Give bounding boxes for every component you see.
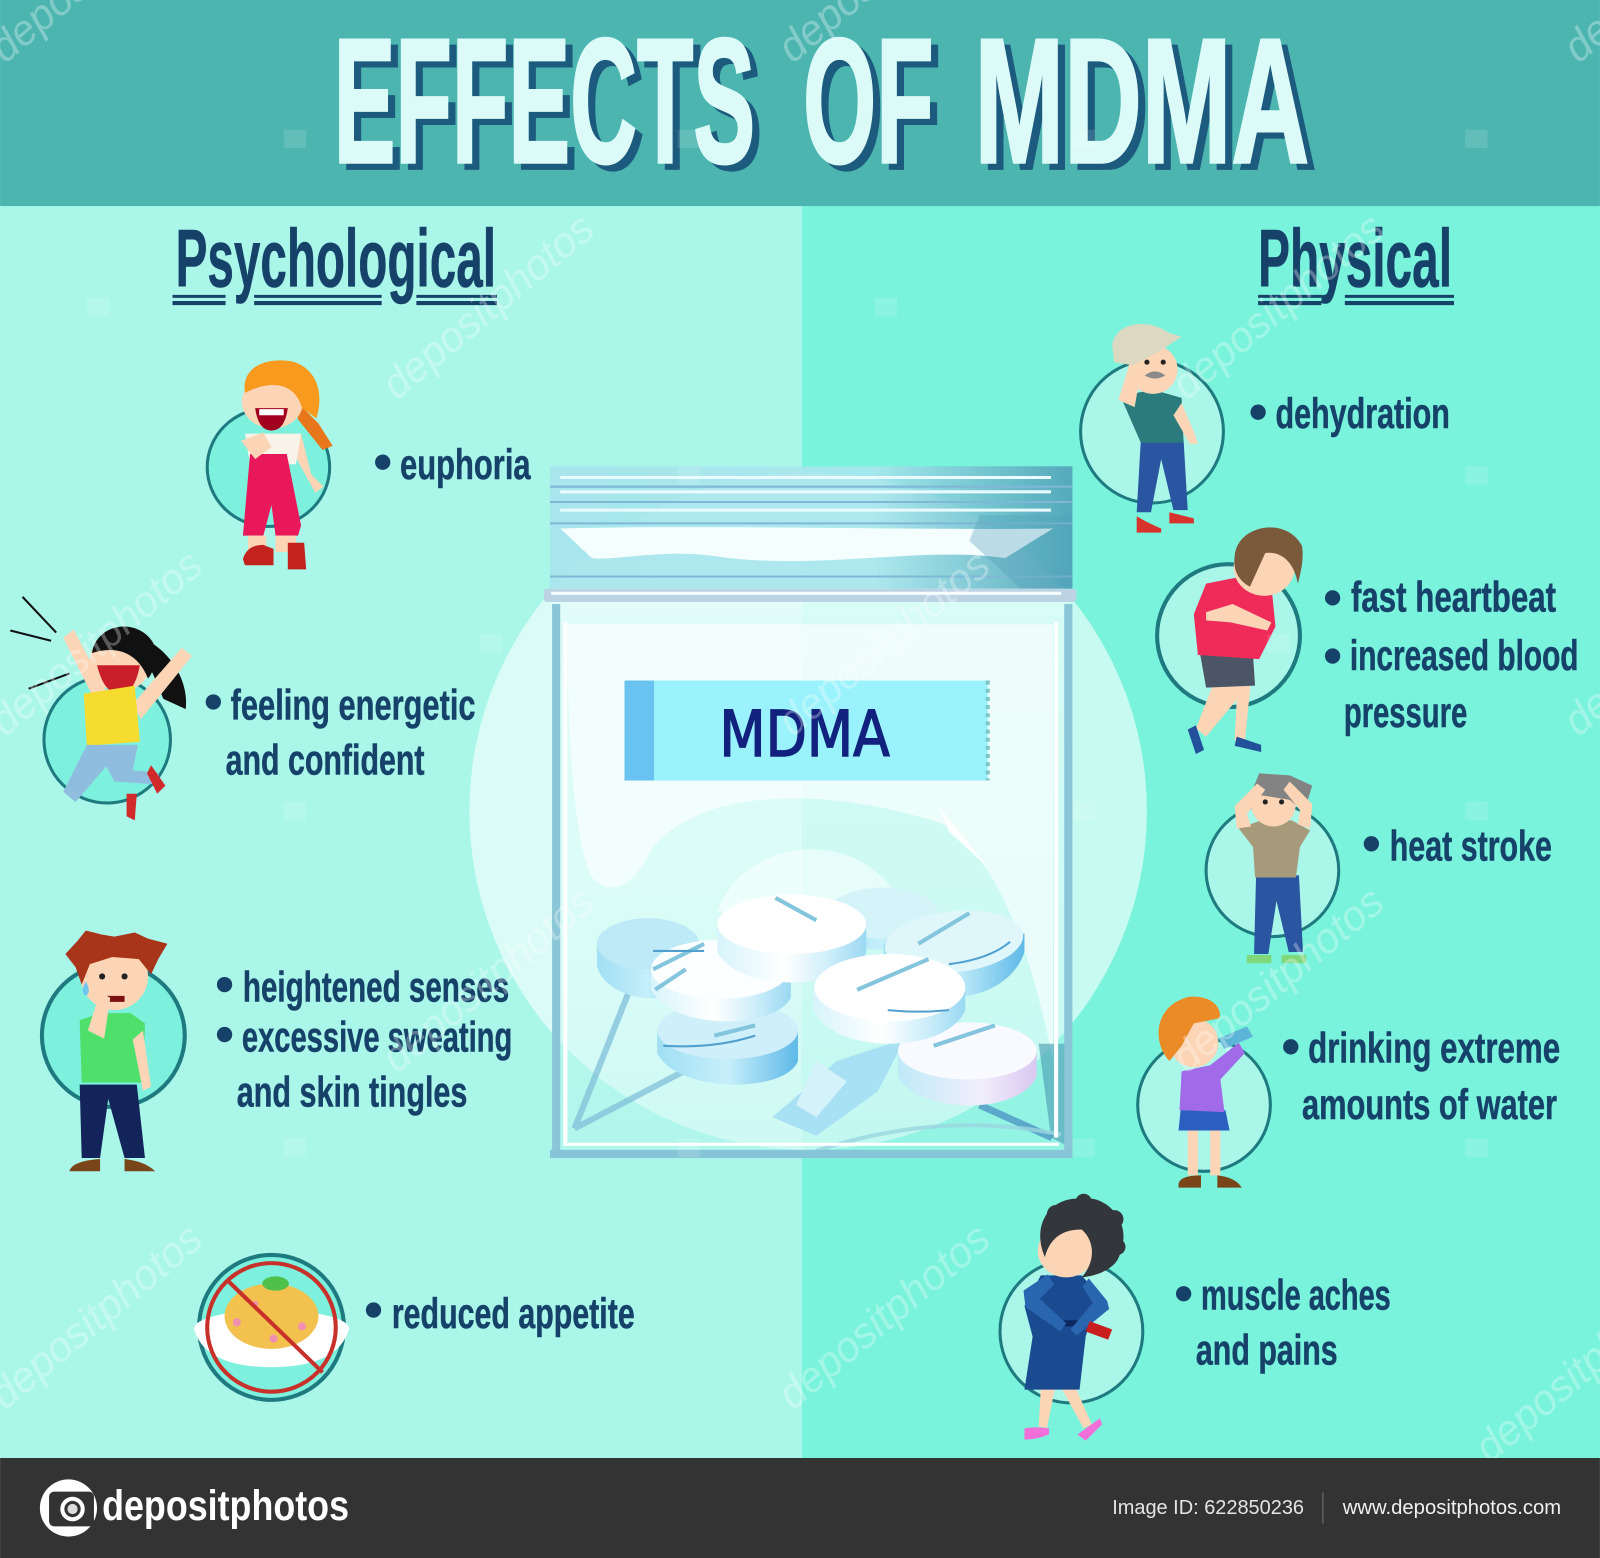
watermarks: depositphotos xyxy=(1162,204,1393,409)
background: psychological side xyxy=(0,204,802,1459)
icon: boy drinking water xyxy=(1138,997,1270,1188)
watermarks: depositphotos xyxy=(373,877,603,1082)
item: muscle aches and pains xyxy=(1000,1194,1391,1441)
icon: shouting girl xyxy=(10,597,192,820)
bag seal bar xyxy=(544,589,1077,602)
label: MDMA xyxy=(625,681,988,781)
text: heightened senses, sweating, tingles: heightened senses xyxy=(243,963,509,1011)
bag body xyxy=(550,602,1072,1158)
item: dehydration xyxy=(1081,324,1450,533)
icon: happy girl xyxy=(207,360,333,569)
text: heightened senses, sweating, tingles xyxy=(237,963,512,1117)
footer logo: depositphotos xyxy=(102,1482,349,1530)
title: EFFECTS xyxy=(334,1,755,200)
text: euphoria: euphoria xyxy=(400,441,531,489)
title: OF xyxy=(810,7,941,206)
watermarks: depositphotos xyxy=(373,204,603,409)
watermarks: depositphotos xyxy=(768,541,999,745)
item: euphoria xyxy=(207,360,531,569)
item: reduced appetite xyxy=(194,1255,635,1400)
text: feeling energetic and confident xyxy=(226,681,476,784)
background: physical side xyxy=(802,204,1600,1459)
icon: woman in pain xyxy=(1000,1194,1143,1441)
text: feeling energetic and confident: feeling energetic xyxy=(231,681,476,729)
item: drinking extreme amounts of water xyxy=(1138,997,1560,1188)
title: EFFECTS xyxy=(341,7,762,206)
text: heightened senses, sweating, tingles: excessive sweating xyxy=(242,1013,512,1061)
text: muscle aches and pains xyxy=(1196,1272,1391,1375)
title: MDMA xyxy=(982,7,1316,206)
icon: anxious boy xyxy=(42,931,185,1171)
icon: man holding head xyxy=(1206,773,1339,963)
icon: old man with cap xyxy=(1081,324,1223,533)
text: muscle aches and pains: muscle aches xyxy=(1201,1272,1391,1320)
text: heightened senses, sweating, tingles: and skin tingles xyxy=(237,1069,467,1117)
text: fast heartbeat, increased blood pressure: pressure xyxy=(1344,689,1467,737)
bag zip section xyxy=(550,466,1072,589)
icon: boy clutching chest xyxy=(1157,527,1303,754)
heading: Physical xyxy=(1258,214,1454,305)
footer image id: Image ID: 622850236 xyxy=(1112,1497,1304,1519)
text: muscle aches and pains: and pains xyxy=(1196,1327,1338,1375)
text: drinking extreme amounts of water xyxy=(1302,1025,1560,1129)
title: MDMA xyxy=(974,1,1309,200)
text: reduced appetite: reduced appetite xyxy=(392,1290,635,1338)
label: MDMA: MDMA xyxy=(719,697,890,771)
item: fast heartbeat, increased blood pressure xyxy=(1157,527,1578,754)
icon: no food xyxy=(194,1255,349,1400)
central white circle xyxy=(469,472,1147,1150)
MDMA bag of pills xyxy=(544,466,1077,1158)
heading: Physical: Physical xyxy=(1258,214,1452,305)
pills xyxy=(597,888,1037,1136)
title: OF xyxy=(803,1,934,200)
item: heat stroke xyxy=(1206,773,1552,963)
text: fast heartbeat, increased blood pressure xyxy=(1344,574,1578,737)
item: feeling energetic and confident xyxy=(10,597,476,820)
heading: Psychological xyxy=(173,214,497,305)
text: dehydration: dehydration xyxy=(1275,390,1450,438)
header band xyxy=(0,0,1600,206)
watermarks: depositphotos xyxy=(768,1214,999,1419)
footer website: www.depositphotos.com xyxy=(1342,1497,1561,1519)
watermarks: depositphotos xyxy=(1162,877,1393,1082)
item: heightened senses, sweating, tingles xyxy=(42,931,512,1171)
footer logo xyxy=(40,1479,349,1537)
text: feeling energetic and confident: and confident xyxy=(226,736,425,784)
footer bar xyxy=(0,1458,1600,1558)
heading: Psychological: Psychological xyxy=(176,214,496,305)
